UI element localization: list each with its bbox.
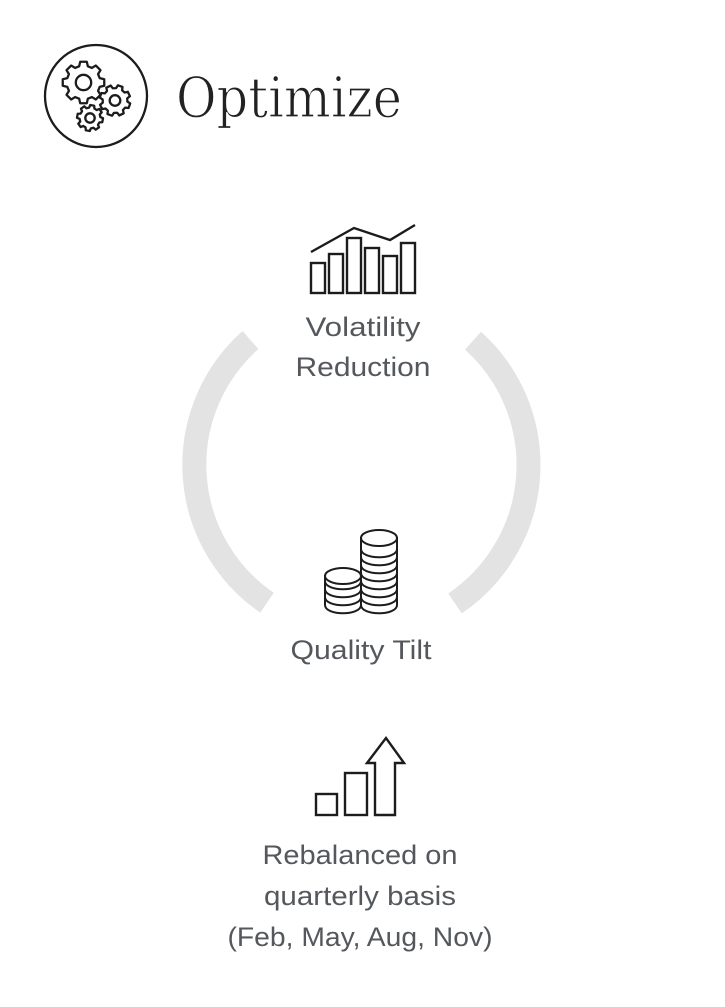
- text: rebalancing schedule: Rebalanced on: [262, 840, 458, 870]
- right arc: [455, 341, 529, 603]
- title: Optimize: [176, 66, 402, 131]
- icon: gears in circle: [45, 45, 147, 147]
- text: rebalancing schedule: (Feb, May, Aug, Nov): [228, 922, 492, 952]
- icon: rising bars with arrow: [316, 738, 404, 815]
- icon: coin stacks: [325, 530, 397, 613]
- left arc: [194, 340, 267, 603]
- text: rebalancing schedule: quarterly basis: [264, 881, 456, 911]
- text: Volatility Reduction: [296, 312, 430, 382]
- text: Volatility Reduction: Reduction: [296, 352, 430, 382]
- text: Quality Tilt: Quality Tilt: [290, 635, 432, 665]
- icon: bar chart with trend line: [311, 225, 415, 293]
- text: Volatility Reduction: Volatility: [306, 312, 421, 342]
- text: rebalancing schedule: [228, 840, 492, 952]
